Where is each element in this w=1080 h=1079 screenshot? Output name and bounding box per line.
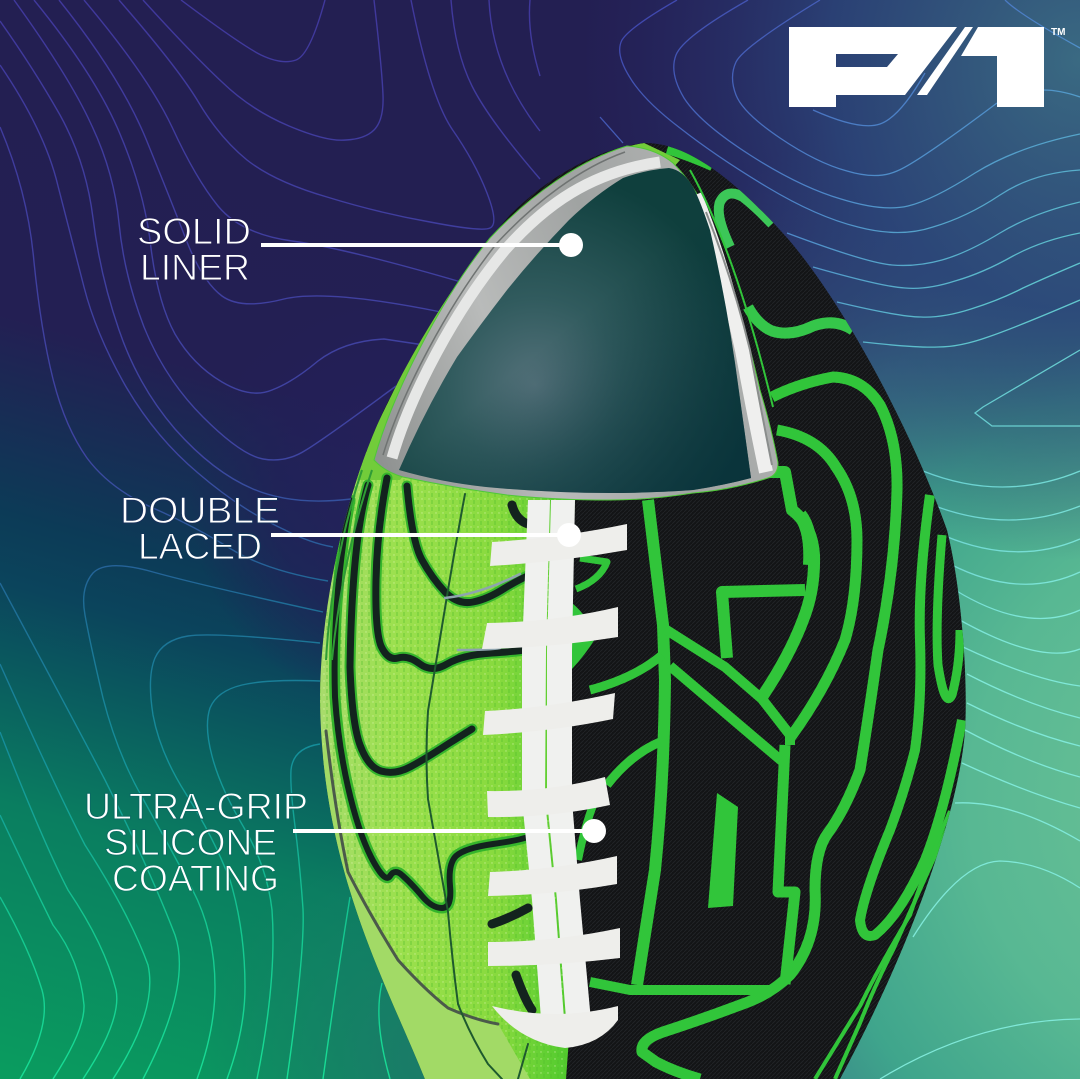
football	[300, 143, 966, 1079]
callout: double laced: DOUBLE	[120, 490, 280, 531]
silicone sheen on dark lines	[445, 574, 520, 650]
green wedge near laces	[572, 603, 595, 669]
cross lace 1	[490, 524, 627, 566]
cutaway: silver rim	[374, 146, 778, 500]
background contour lines: right	[600, 0, 1080, 1079]
cross lace 6	[488, 928, 620, 966]
cross lace 2	[482, 607, 618, 649]
laces	[482, 500, 627, 1048]
trademark: TM	[1051, 27, 1065, 38]
callout: solid liner	[137, 211, 583, 288]
bottom lace loop	[492, 1006, 618, 1048]
dark lines on mesh	[326, 478, 532, 1079]
thin rim lines	[326, 470, 372, 660]
callout: double laced	[120, 490, 581, 567]
lime mesh panel	[300, 440, 575, 1079]
background contour lines: left	[0, 0, 540, 1079]
green bar inside the number 1	[708, 793, 738, 908]
callout: ultra-grip silicone coating: SILICONE	[104, 822, 277, 863]
callout: double laced: LACED	[138, 526, 262, 567]
green line pattern on black panel	[576, 150, 962, 1079]
cross lace 3	[483, 693, 615, 735]
right center lace strip	[547, 500, 592, 1032]
callout: solid liner: SOLID	[137, 211, 251, 252]
callout: solid liner: LINER	[140, 247, 250, 288]
callout: ultra-grip silicone coating	[84, 786, 606, 899]
cross lace 4	[487, 777, 610, 817]
callout: ultra-grip silicone coating: ULTRA-GRIP	[84, 786, 308, 827]
mesh texture	[320, 478, 569, 1078]
left center lace strip	[522, 500, 565, 1032]
cross lace 5	[488, 856, 617, 896]
callout: ultra-grip silicone coating: COATING	[112, 858, 279, 899]
ball body: black fabric	[320, 143, 966, 1079]
P1 logo	[789, 27, 1065, 107]
green glow around dark lines	[335, 478, 530, 908]
cutaway: solid liner	[399, 168, 751, 493]
lower lime band	[320, 731, 530, 1079]
top-left rim	[350, 143, 680, 480]
